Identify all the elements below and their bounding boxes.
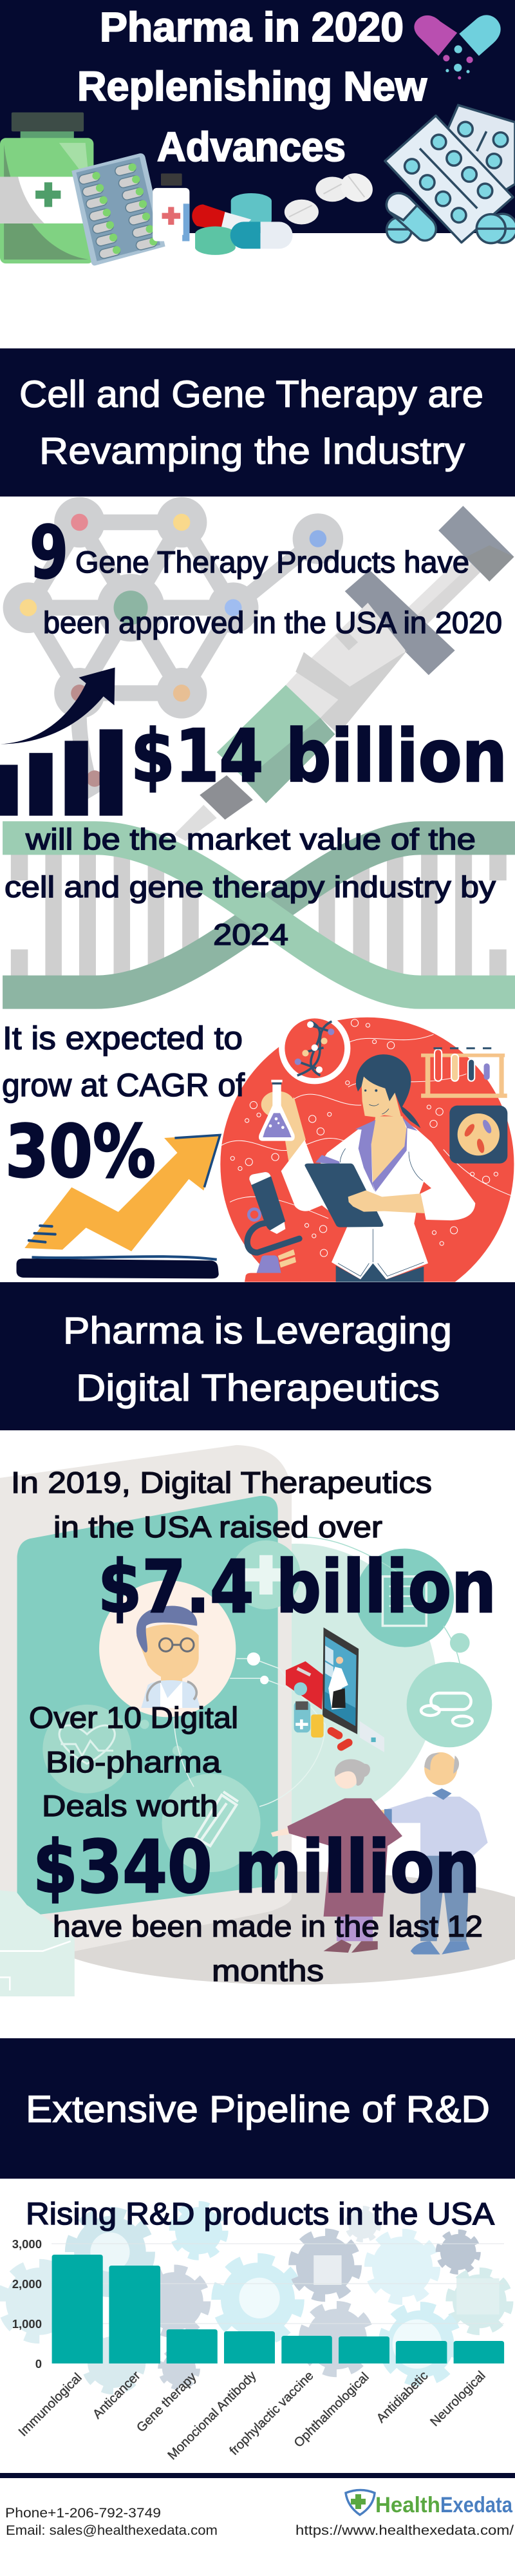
panel: section heading R and D: Extensive Pipeline of R&D [26,2088,490,2130]
trousers [336,1264,424,1282]
title [77,4,427,170]
title: Advances [157,124,346,170]
panel: cell and gene therapy background art [0,497,515,992]
icon: test tube rack [421,1047,507,1098]
footer divider [0,2473,515,2478]
hair [356,1054,420,1128]
y axis labels: 3,000 [12,2237,42,2251]
shape: ground ellipse [33,1871,515,1985]
category labels: Anticancer [90,2369,144,2421]
text: digital therapeutics raised: In 2019, Digital Therapeutics [11,1466,432,1499]
icon: syringe [174,506,514,841]
title: Pharma in 2020 [100,4,404,50]
text: nine gene therapy products [30,511,502,639]
panel: section heading cell and gene therapy: Revamping the Industry [39,430,465,472]
decoration: gears behind chart [3,2205,509,2390]
panel: section heading cell and gene therapy: Cell and Gene Therapy are [19,374,483,415]
category labels: Ophthalmological [292,2370,372,2450]
text: last twelve months [53,1909,483,1987]
text: market value: 2024 [213,918,288,951]
clipboard and hand [304,1155,425,1227]
icon: blister packs right [385,105,515,243]
text: biopharma deals: Deals worth [42,1789,218,1823]
text: market value: will be the market value of the [25,822,476,856]
text: CAGR: 30% [5,1110,156,1194]
icon: growth arrow [0,668,115,744]
footer: contact details [5,2506,218,2538]
flask and raised arm [259,1080,306,1161]
text: CAGR: grow at CAGR of [2,1067,245,1103]
text: last twelve months: months [212,1954,324,1987]
shape: tablet device [0,1445,292,1951]
text: nine gene therapy products: been approved in the USA in 2020 [43,605,502,639]
footer: contact details: Phone+1-206-792-3749 [5,2506,161,2521]
icon: molecule network [3,497,343,795]
red circle background [220,1018,514,1311]
panel: digital therapeutics illustration [0,1445,515,1996]
text: biopharma deals [29,1701,238,1823]
body: chest and face [362,1077,407,1183]
icon: DNA in ring [282,1016,348,1081]
text: digital therapeutics raised [11,1466,432,1544]
y axis labels [12,2237,42,2371]
illustration: lab backdrop [220,1018,514,1282]
footer: website: https://www.healthexedata.com/ [295,2523,514,2538]
icon: green medicine bottle [0,112,93,263]
text: market value [5,822,496,951]
footer: contact details: Email: sales@healthexedata.com [6,2523,218,2538]
logo: HealthExedata [346,2490,513,2517]
text: CAGR [2,1020,245,1194]
text: last twelve months: have been made in the last 12 [53,1909,483,1943]
chart title: Rising R&D products in the USA [26,2197,494,2231]
bars [52,2255,504,2363]
category labels: Monocional Antibody [165,2369,259,2463]
icon: shield with plus [346,2490,375,2515]
category labels: Immunological [16,2371,85,2439]
text: CAGR: It is expected to [3,1020,243,1056]
panel: CAGR artwork [17,1018,514,1282]
category labels: frophylactic vaccine [227,2369,317,2458]
panel: header background [0,0,515,233]
icon: growth bars [0,729,122,816]
icon: DNA strands and rungs [3,838,515,992]
text: nine gene therapy products: Gene Therapy Products have [75,545,469,579]
panel: section heading digital therapeutics: Pharma is Leveraging [63,1310,452,1352]
panel: section heading cell and gene therapy [0,348,515,497]
title: Replenishing New [77,63,427,109]
icon: bacteria dish [449,1106,507,1164]
icons: health circles [42,1537,492,1872]
icon: medical case corner [0,1890,75,1996]
body: lab coat [281,1121,475,1280]
category labels: Gene therapy [134,2370,200,2435]
y axis labels: 0 [35,2357,42,2371]
panel: section heading R and D [0,2038,515,2179]
icon: tablets and capsules [192,168,377,255]
text: biopharma deals: Over 10 Digital [29,1701,238,1734]
bar chart: R and D products [12,2237,504,2463]
header illustration: medicines [0,15,515,265]
figure: scientist with flask, microscope and dish [245,1054,507,1282]
text: biopharma deals: Bio-pharma [46,1745,221,1779]
lapels [355,1117,417,1192]
icon: blister pack of green capsules [71,153,165,265]
category labels [16,2369,489,2463]
icon: split capsule with particles [414,15,501,79]
panel: section heading digital therapeutics [0,1282,515,1430]
logo: HealthExedata: Health [375,2493,440,2517]
y axis labels: 1,000 [12,2317,42,2331]
text: nine gene therapy products: 9 [30,511,68,595]
coat seams [338,1148,424,1276]
y axis labels: 2,000 [12,2277,42,2291]
text: market value: cell and gene therapy industry by [5,870,496,904]
icon: rising gold arrow [17,1135,220,1278]
category labels: Antidiabetic [374,2369,431,2426]
figure: elderly couple [271,1752,488,1955]
shape: large pale circle [154,1544,437,1826]
icon: smartphone with doctor and medical kit [286,1627,384,1752]
category labels: Neurological [427,2369,489,2429]
microscope [245,1172,301,1282]
icon: small medicine bottle [153,173,189,241]
text: digital therapeutics raised: in the USA raised over [53,1510,382,1544]
panel: section heading digital therapeutics: Digital Therapeutics [76,1367,440,1409]
figure: doctor avatar [99,1580,236,1717]
